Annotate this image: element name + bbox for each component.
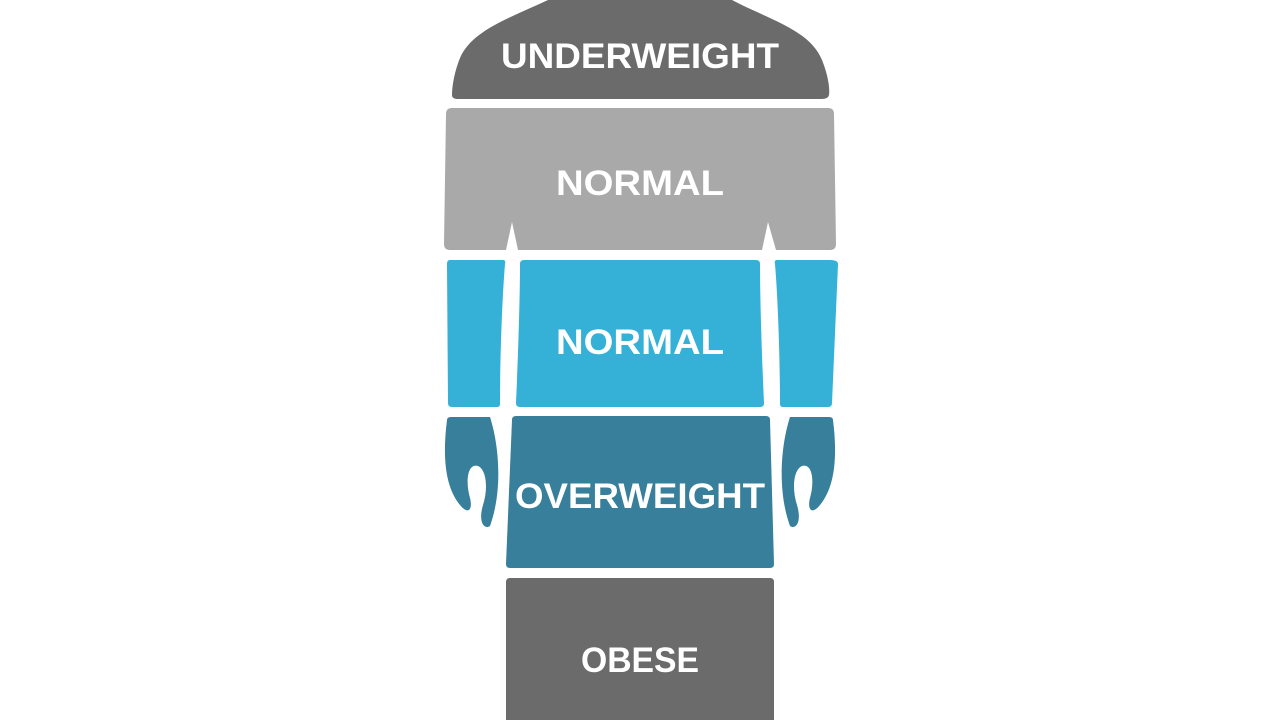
segment: obese bbox=[506, 578, 774, 720]
segment: normal chest bbox=[444, 108, 836, 250]
label: obese: OBESE bbox=[581, 641, 699, 680]
label: underweight: UNDERWEIGHT bbox=[501, 37, 779, 76]
segment: normal waist and arms bbox=[447, 260, 838, 407]
segment: overweight belly and hands bbox=[445, 416, 835, 568]
label: normal: NORMAL bbox=[556, 323, 724, 362]
label: normal: NORMAL bbox=[556, 164, 724, 203]
label: overweight: OVERWEIGHT bbox=[515, 477, 765, 516]
segment: underweight head bbox=[452, 0, 829, 99]
